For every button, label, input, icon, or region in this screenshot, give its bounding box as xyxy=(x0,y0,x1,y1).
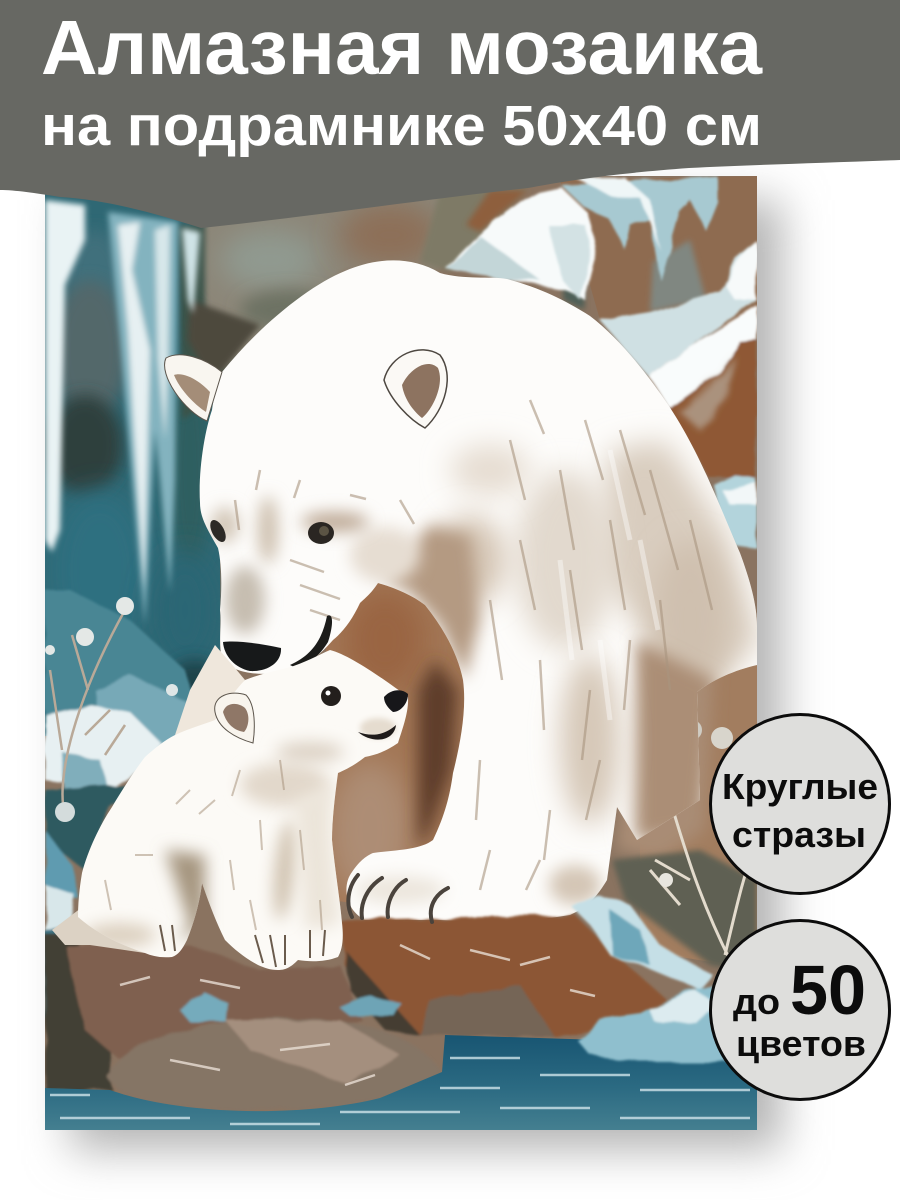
plants right xyxy=(649,722,746,956)
bear eyes xyxy=(210,520,334,544)
mother polar bear xyxy=(165,260,760,921)
title line 2: на подрамнике 50х40 см xyxy=(41,94,762,158)
cub face xyxy=(321,686,408,740)
badge: round rhinestones xyxy=(710,714,890,894)
badge: up to 50 colors: до xyxy=(733,981,780,1022)
brown area under the bear xyxy=(326,583,464,902)
title line 1: Алмазная мозаика xyxy=(41,5,763,91)
header banner xyxy=(0,0,900,228)
rocks foreground xyxy=(45,915,667,1110)
winter plants left xyxy=(45,597,178,822)
polar bear cub xyxy=(78,650,448,970)
badge: round rhinestones: стразы xyxy=(732,814,866,855)
bear muzzle and nose xyxy=(223,615,332,671)
badge: round rhinestones: Круглые xyxy=(722,766,878,807)
lower left rocks and snow xyxy=(45,590,195,1020)
snow and ice upper right xyxy=(447,176,757,548)
bear right ear xyxy=(384,350,447,428)
cub ear xyxy=(215,693,254,743)
mother's paw claws xyxy=(348,875,448,922)
badge: up to 50 colors xyxy=(710,920,890,1100)
canvas drop shadow xyxy=(70,200,782,1150)
badge: up to 50 colors: цветов xyxy=(736,1023,866,1064)
bear left ear xyxy=(165,355,222,421)
painting background: cave walls xyxy=(45,176,757,1130)
icicles left xyxy=(45,200,200,625)
snowy ledge under the cub xyxy=(52,910,144,953)
water xyxy=(45,1035,757,1130)
painting: polar bear with cub xyxy=(45,176,760,1130)
mother chest behind the cub xyxy=(175,645,245,735)
rock highlights xyxy=(120,945,595,1085)
brown rock and moss to the right of the bear xyxy=(612,640,757,975)
badge: up to 50 colors: 50 xyxy=(790,951,866,1029)
ice chunks right xyxy=(572,894,726,1066)
